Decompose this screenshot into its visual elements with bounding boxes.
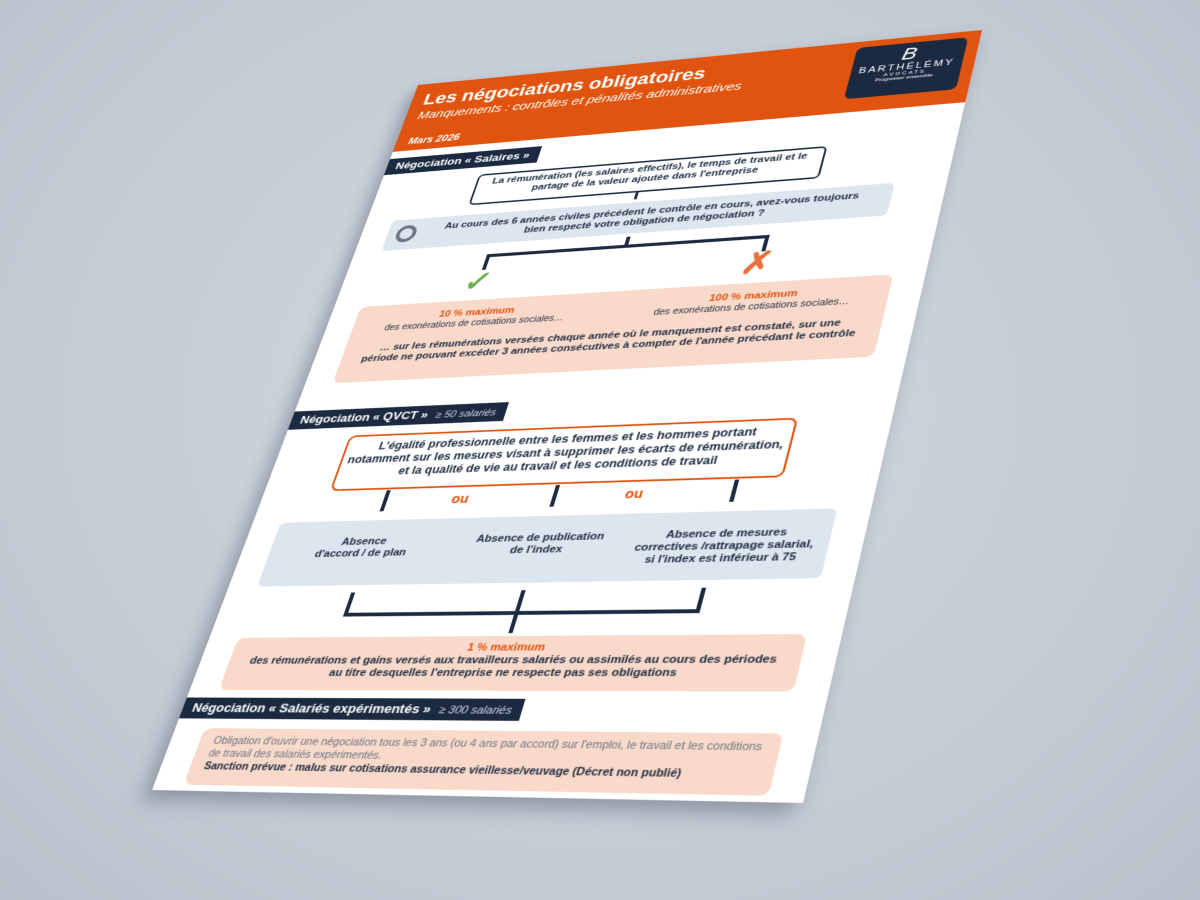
label: Salaires [384,146,542,175]
pink box: 1%: des rémunérations et gains versés aux travailleurs salariés ou assimilés au cours des périodes au titre desquelles l'entreprise ne respecte pas ses obligations [248,654,778,679]
box: égalité professionnelle [330,418,798,491]
blue box: absences: Absence de publication [475,531,606,545]
pink box: sanctions salaires [332,274,894,383]
blue box: absences: de l'index [508,544,564,556]
blue box: absences [257,508,837,587]
label: Salaires: Négociation « Salaires » [394,149,532,172]
date: Mars 2026 [407,132,461,146]
blue box: absences: Absence [340,536,388,548]
logo: AVOCATS [883,69,926,78]
label: salariés expérimentés: Négociation « Salariés expérimentés » ≥ 300 salariés [190,700,513,717]
page document [152,30,982,803]
subtitle: Manquements : contrôles et pénalités administratives [416,80,743,122]
logo: Progresser ensemble [874,73,933,83]
pink box: obligation: Obligation d'ouvrir une négociation tous les 3 ans (ou 4 ans par accord) sur l'emploi, le travail et les conditions de travail des salariés expérimentés. [207,735,764,762]
logo: BARTHÉLÉMY [858,58,956,76]
pink box: sanctions salaires: 10 % maximum [437,305,516,319]
pink box: sanctions salaires: 100 % maximum [708,288,799,304]
icon: magnifier [393,225,419,243]
bracket merge [342,587,706,634]
arrows and ou: ou [623,486,645,501]
bracket split [482,234,770,270]
box: égalité professionnelle: L'égalité professionnelle entre les femmes et les hommes portant notamment sur les mesures visant à supprimer les écarts de rémunération, et la qualité de vie au travail et les conditions de travail [346,425,785,477]
blue box: absences: Absence de mesures correctives /rattrapage salarial, si l'index est inférieur à 75 [633,527,815,566]
icon: cross: ✗ [737,245,777,281]
logo: B [900,43,919,64]
question box: Au cours des 6 années civiles précédent le contrôle en cours, avez-vous toujours bien respecté votre obligation de négociation ? [443,191,860,235]
pink box: sanctions salaires: des exonérations de cotisations sociales… [652,297,851,318]
arrows and ou [379,479,740,512]
title: Les négociations obligatoires [421,64,708,108]
logo [844,37,968,99]
pink box: obligation [184,728,783,796]
header band [393,30,982,152]
pink box: 1% [219,634,807,692]
icon: check: ✓ [459,266,496,298]
label: QVCT [288,402,509,430]
question box [381,183,895,251]
arrows and ou: ou [449,491,471,506]
box: rémunération [468,146,828,205]
arrow [634,191,639,199]
box: rémunération: La rémunération (les salaires effectifs), le temps de travail et le partage de la valeur ajoutée dans l'entreprise [491,151,809,192]
pink box: 1%: 1 % maximum [466,642,547,654]
label: QVCT: Négociation « QVCT » ≥ 50 salariés [298,408,498,426]
pink box: obligation: Sanction prévue : malus sur cotisations assurance vieillesse/veuvage (Décret non publié) [202,760,683,780]
pink box: sanctions salaires: des exonérations de cotisations sociales… [383,314,565,333]
label: salariés expérimentés [179,697,526,721]
pink box: sanctions salaires: … sur les rémunérations versées chaque année où le manquement est constaté, sur une période ne pouvant excéder 3 années consécutives à compter de l'année précédant le contrôle [360,318,857,364]
blue box: absences: d'accord / de plan [313,547,408,560]
